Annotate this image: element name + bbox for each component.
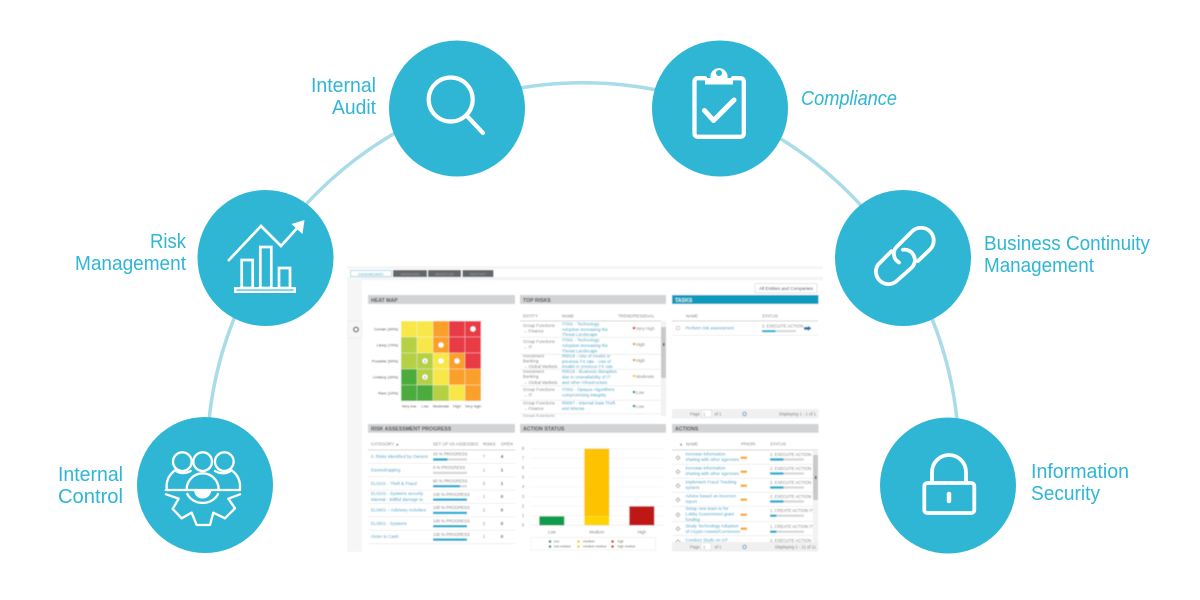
- panel: risk assessment progress: 2: [483, 508, 486, 512]
- panel: risk assessment progress: 5: [483, 481, 486, 486]
- node: Internal Control: Control: [58, 486, 123, 508]
- actions pager: Displaying 1 - 11 of 11: [775, 544, 817, 550]
- action rows: [672, 452, 820, 544]
- action rows: 1. CREATE ACTION ITEM: [770, 524, 820, 529]
- panel: risk assessment progress: 43 % PROGRESS: [433, 452, 468, 456]
- legend: [531, 538, 656, 550]
- panel: tasks: 2. EXECUTE ACTION: [762, 324, 803, 328]
- risk table rows: Banking: [523, 374, 539, 379]
- risk table rows: Investment: [523, 369, 545, 374]
- panel: top risks: NAME: [562, 314, 574, 318]
- panel: risk assessment progress: EL0102 - Systems security: [371, 491, 424, 496]
- risk table rows: IT002 - Opaque Algorithms: [562, 387, 615, 392]
- panel: risk assessment progress: 7: [483, 454, 486, 459]
- refresh icon: [347, 321, 362, 338]
- panel: actions: NAME: [686, 442, 698, 446]
- node: Internal Audit: Internal: [311, 75, 376, 97]
- bar chart: 4: [522, 484, 525, 489]
- legend: high residue: [618, 544, 636, 548]
- icon: bar chart with arrow: [228, 220, 304, 292]
- node: Internal Audit: Audit: [332, 97, 376, 119]
- node: Risk Management: Risk: [150, 231, 187, 253]
- icon: clipboard with check: [694, 68, 744, 137]
- risk table rows: High: [636, 358, 645, 363]
- panel: heat map: [368, 295, 515, 408]
- panel: action status: ACTION STATUS: [523, 426, 565, 432]
- action rows: 2. EXECUTE ACTION: [770, 538, 811, 543]
- panel: heat map: HEAT MAP: [371, 298, 398, 304]
- risk table rows: → Finance: [523, 406, 544, 411]
- actions pager: 1: [703, 544, 706, 550]
- panel: risk assessment progress: EL0401 – Advisory Activities: [371, 508, 427, 512]
- pager: 1: [703, 412, 706, 416]
- bar chart: [522, 446, 663, 534]
- panel: risk assessment progress: internal - Willful damage to: [371, 497, 424, 502]
- panel: risk assessment progress: 0: [501, 494, 504, 500]
- actions pager: [672, 542, 818, 552]
- risk table rows: invalid or previous FX rate: [562, 364, 614, 369]
- action rows: 2. EXECUTE ACTION: [770, 480, 811, 485]
- panel: top risks: [520, 295, 666, 418]
- panel: heat map: 2: [424, 358, 427, 364]
- actions scrollbar: [813, 450, 818, 542]
- action rows: Setup new team to for: [686, 506, 729, 511]
- action rows: Increase information: [686, 452, 726, 456]
- pager: of 1: [714, 412, 722, 416]
- panel: heat map: Possible (50%): [372, 358, 399, 364]
- panel: risk assessment progress: 80 % PROGRESS: [433, 478, 468, 483]
- panel: heat map: Very high: [465, 404, 481, 408]
- filter button: [755, 284, 817, 293]
- panel: risk assessment progress: 0: [501, 508, 504, 514]
- panel: top risks: ENTITY: [523, 314, 538, 318]
- panel: risk assessment progress: 1: [501, 468, 504, 474]
- panel: tasks: NAME: [686, 314, 698, 318]
- filter button: All Entities and Companies: [759, 286, 814, 291]
- action rows: Advice based on incorrect: [686, 494, 737, 498]
- node: Risk Management: [75, 190, 334, 326]
- bar chart: 1: [522, 513, 525, 518]
- node: Internal Control: Internal: [58, 464, 123, 486]
- panel: risk assessment progress: RISKS: [483, 442, 496, 446]
- tab bar: REPORT: [470, 271, 487, 276]
- risk table rows: R0019 - Use of invalid or: [562, 354, 611, 358]
- action rows: Study Technology Adoption: [686, 524, 739, 528]
- risk table rows: → IT: [523, 392, 533, 398]
- risk table rows: Adoption increasing the: [562, 327, 608, 332]
- risk table rows: → Global Markets: [523, 364, 557, 369]
- node: Information Security: Security: [1031, 483, 1100, 505]
- risk table rows: R0007 - Internal Data Theft: [562, 400, 616, 406]
- risk table rows: and other infrastructure: [562, 380, 608, 385]
- bar chart: 2: [522, 503, 525, 508]
- panel: risk assessment progress: SET UP VS ASSESSED: [433, 442, 478, 446]
- node: Information Security: Information: [1031, 461, 1129, 483]
- risk table rows: → Global Markets: [523, 380, 557, 385]
- panel: tasks: Perform risk assessment: [686, 326, 735, 330]
- action rows: system: [686, 485, 700, 490]
- panel: action status: [520, 424, 666, 550]
- panel: tasks: [672, 295, 818, 418]
- panel: actions: PRIORI: [741, 442, 755, 446]
- pager: Page: [690, 412, 700, 416]
- panel: tasks: TASKS: [675, 298, 693, 304]
- node: Business Continuity Management: Management: [984, 255, 1094, 277]
- action rows: funding: [686, 517, 700, 522]
- bar chart: 0: [522, 522, 525, 528]
- panel: risk assessment progress: EL0101 - Theft & Fraud: [371, 481, 417, 486]
- action rows: sharing with other agencies: [686, 457, 740, 462]
- risk table rows: Investment: [523, 354, 545, 358]
- actions pager: of 1: [714, 544, 722, 550]
- action rows: of Crypto Assets/Currencies: [686, 529, 741, 534]
- node: Compliance: Compliance: [801, 88, 897, 110]
- node: Information Security: [880, 418, 1129, 554]
- panel: risk assessment progress: OPEN: [501, 442, 513, 446]
- panel: risk assessment progress: 100 % PROGRESS: [433, 518, 470, 524]
- risk table rows: compromising integrity: [562, 392, 607, 398]
- node: Risk Management: Management: [75, 253, 186, 275]
- panel: risk assessment progress: 2: [483, 521, 486, 526]
- panel: risk assessment progress: [368, 424, 515, 544]
- risk table rows: Group Functions: [523, 323, 555, 328]
- panel: heat map: Likely (70%): [377, 342, 399, 348]
- node: Compliance: [652, 40, 897, 176]
- panel: actions: ACTIONS: [675, 426, 699, 432]
- panel: risk assessment progress: RISK ASSESSMENT PROGRESS: [371, 426, 452, 432]
- node: Internal Control: [58, 417, 273, 553]
- panel: heat map: Certain (90%): [374, 326, 399, 332]
- bar chart: 5: [522, 475, 525, 480]
- legend: medium residue: [583, 544, 607, 548]
- legend: high: [618, 540, 624, 544]
- panel: heat map: Unlikely (30%): [373, 374, 399, 380]
- risk table rows: R0018 - Business disruption: [562, 369, 617, 374]
- panel: actions: ▲: [679, 442, 683, 446]
- bar chart: 7: [522, 456, 525, 460]
- actions pager: Page: [690, 544, 700, 550]
- icon: chain link: [876, 228, 934, 284]
- dashboard screenshot: [347, 266, 823, 552]
- panel: heat map: 2: [424, 374, 427, 380]
- bar chart: 6: [522, 465, 525, 470]
- pager: Displaying 1 - 1 of 1: [779, 412, 817, 416]
- risk table rows: Group Functions: [523, 414, 555, 418]
- panel: heat map: High: [453, 404, 461, 408]
- risk table rows: IT001 - Technology: [562, 338, 600, 342]
- legend: medium: [583, 540, 595, 544]
- legend: low: [554, 540, 560, 544]
- tab bar: DASHBOARD: [358, 271, 384, 276]
- panel: risk assessment progress: Order to Cash: [371, 534, 399, 539]
- icon: padlock: [924, 455, 974, 513]
- risk table rows: Low: [636, 404, 645, 409]
- panel: risk assessment progress: CATEGORY ▲: [371, 442, 399, 446]
- panel: top risks: TREND/RESIDUAL: [618, 314, 655, 318]
- panel: heat map: Low: [421, 404, 429, 408]
- action rows: Increase information: [686, 466, 726, 470]
- node: Internal Audit: [311, 40, 525, 176]
- bar chart: 3: [522, 494, 525, 499]
- risk table rows: → IT: [523, 344, 533, 350]
- heat map grid: [401, 321, 481, 401]
- panel: risk assessment progress: 0. Risks Identified by Owners: [371, 454, 429, 459]
- panel: tasks: STATUS: [762, 314, 778, 318]
- icon: magnifier: [429, 78, 483, 133]
- panel: risk assessment progress: 100 % PROGRESS: [433, 492, 470, 497]
- risk table rows: Very High: [636, 326, 655, 331]
- bar chart: High: [637, 530, 647, 534]
- panel: risk assessment progress: 1: [483, 534, 486, 539]
- risk table rows: due to unavailability of IT: [562, 374, 611, 380]
- pager: [672, 409, 818, 418]
- risk table rows: [523, 322, 655, 418]
- risk table rows: Group Functions: [523, 387, 555, 392]
- panel: risk assessment progress: 1: [501, 481, 504, 487]
- action rows: report: [686, 499, 698, 504]
- tab bar: MONITOR: [435, 271, 454, 276]
- panel: actions: [672, 424, 820, 552]
- action rows: 2. EXECUTE ACTION: [770, 466, 811, 471]
- bar chart: 8: [522, 446, 525, 451]
- risk table rows: IT001 - Technology: [562, 322, 600, 326]
- action rows: 2. EXECUTE ACTION: [770, 494, 811, 499]
- bar chart: Medium: [589, 530, 605, 534]
- risk table rows: Low: [636, 390, 645, 395]
- connecting arc: [209, 83, 957, 420]
- risk table rows: → Finance: [523, 328, 544, 334]
- panel: risk assessment progress: EL0601 - Systems: [371, 521, 408, 526]
- panel: risk assessment progress: Eavesdropping: [371, 468, 401, 472]
- risk table rows: Group Functions: [523, 339, 555, 344]
- action rows: sharing with other agencies: [686, 471, 740, 476]
- panel: risk assessment progress: 100 % PROGRESS: [433, 505, 470, 510]
- risk table rows: High: [636, 342, 645, 347]
- risk table rows: Threat Landscape: [562, 332, 598, 337]
- action rows: Implement Fraud Tracking: [686, 480, 737, 484]
- panel: heat map: Rare (10%): [378, 390, 399, 396]
- risk table rows: Threat Landscape: [562, 348, 598, 354]
- risk table rows: Adoption increasing the: [562, 343, 608, 348]
- panel: heat map: Moderate: [433, 404, 449, 408]
- icon: people and gear: [166, 452, 240, 525]
- tab bar: MAINTAIN: [401, 271, 420, 276]
- arrow: [804, 326, 812, 331]
- panel: risk assessment progress: 100 % PROGRESS: [433, 532, 470, 537]
- panel: risk assessment progress: 1: [483, 468, 486, 472]
- panel: actions: STATUS: [770, 442, 786, 446]
- risk table rows: Banking: [523, 358, 539, 364]
- panel: risk assessment progress: 1: [483, 494, 486, 499]
- node: Business Continuity Management: Business Continuity: [984, 233, 1150, 255]
- panel: risk assessment progress: 0 % PROGRESS: [433, 465, 465, 470]
- action rows: 1. CREATE ACTION ITEM: [770, 508, 820, 513]
- risk table rows: previous FX rate - Use of: [562, 359, 612, 364]
- risk table rows: and Misuse: [562, 406, 585, 411]
- panel: top risks: TOP RISKS: [523, 298, 551, 304]
- action rows: Conduct Study on IoT: [686, 538, 728, 542]
- panel: heat map: Very low: [402, 404, 417, 408]
- action rows: Lobby Government grant: [686, 512, 735, 516]
- scrollbar: [661, 321, 666, 416]
- panel: risk assessment progress: 4: [501, 454, 504, 460]
- risk table rows: Moderate: [636, 374, 655, 379]
- bar chart: Low: [548, 530, 557, 534]
- node: Business Continuity Management: [835, 190, 1150, 326]
- panel: risk assessment progress: 0: [501, 534, 504, 540]
- action rows: 2. EXECUTE ACTION: [770, 452, 811, 457]
- legend: low residue: [554, 544, 571, 548]
- panel: risk assessment progress: 0: [501, 521, 504, 527]
- tab bar: [350, 270, 494, 277]
- risk table rows: Group Functions: [523, 400, 555, 406]
